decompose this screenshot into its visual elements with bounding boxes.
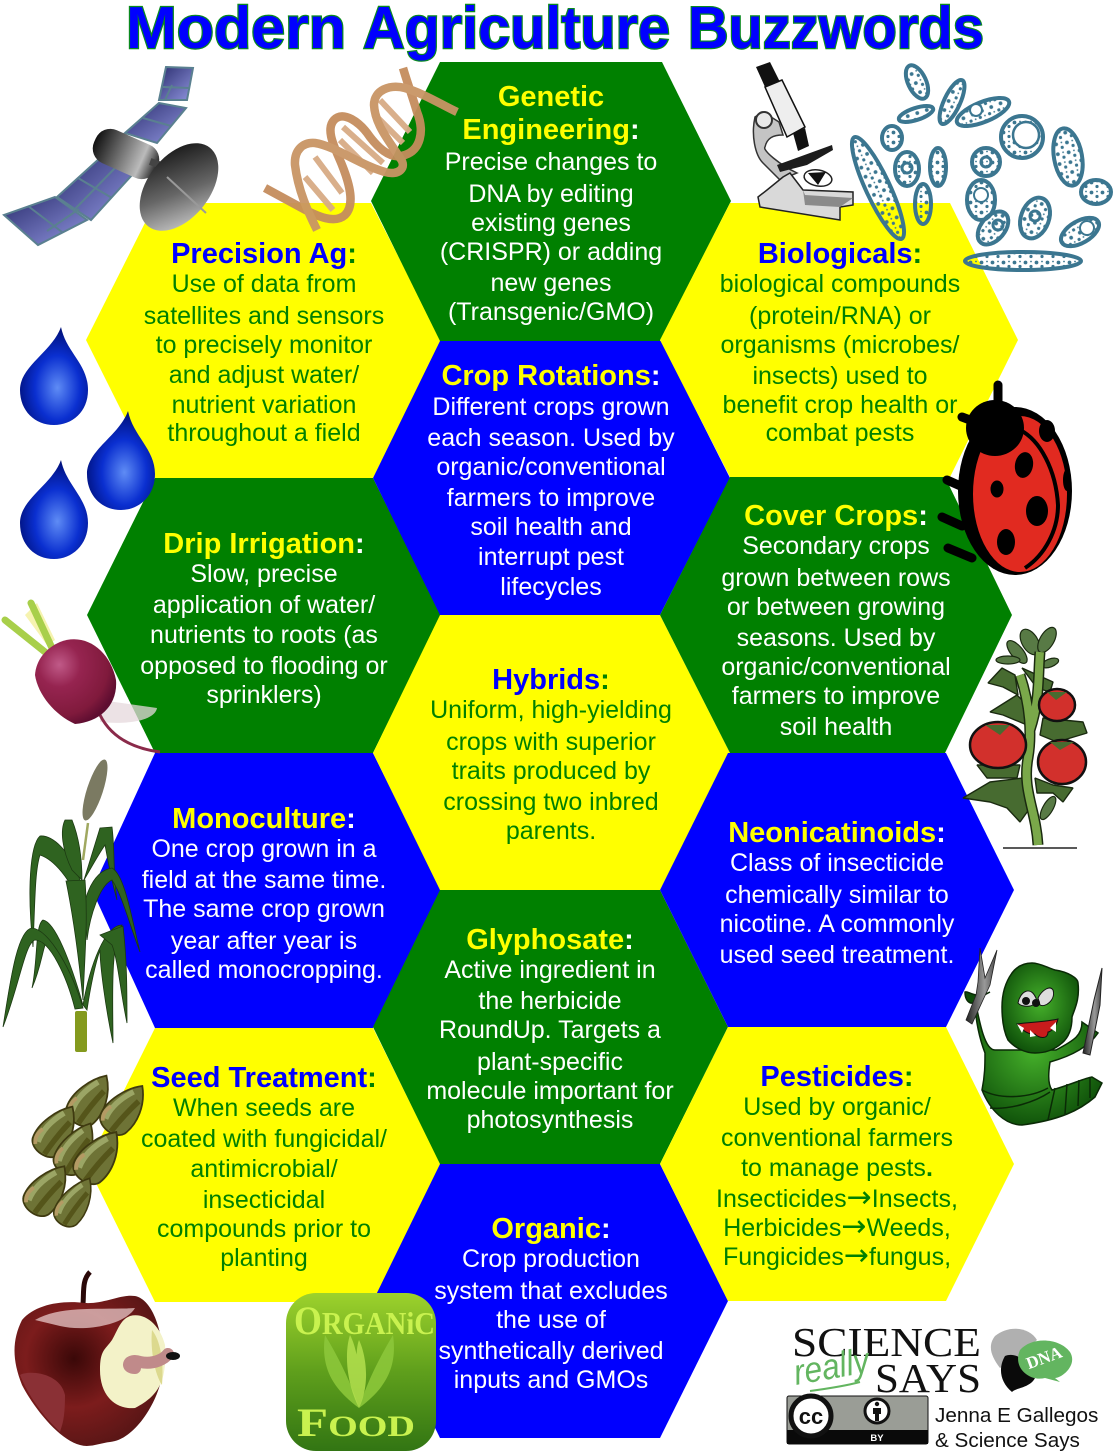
logo: science really says xyxy=(790,1319,1072,1401)
body text: (protein/RNA) or xyxy=(749,302,931,330)
hexagon xyxy=(86,203,441,478)
body text: sprinklers) xyxy=(206,681,322,709)
hexagon xyxy=(92,753,441,1028)
body text: lifecycles xyxy=(500,573,602,601)
body text: Crop production xyxy=(462,1245,640,1273)
badge: creative commons xyxy=(787,1396,928,1444)
heading: Drip Irrigation: xyxy=(163,528,365,560)
hexagon xyxy=(660,753,1014,1027)
body text: conventional farmers xyxy=(721,1124,953,1152)
heading: Precision Ag: xyxy=(171,238,357,270)
icon: satellite xyxy=(4,67,234,245)
panel: cover crops xyxy=(660,477,1012,753)
heading: Biologicals: xyxy=(758,238,922,270)
panel: monoculture xyxy=(92,753,441,1028)
body text: satellites and sensors xyxy=(144,302,384,330)
icon: DNA helix xyxy=(265,68,457,230)
icon: hungry caterpillar xyxy=(965,948,1102,1125)
body text: Use of data from xyxy=(172,270,356,298)
body text: used seed treatment. xyxy=(720,941,954,969)
body text: farmers to improve xyxy=(447,484,655,512)
panel: hybrids xyxy=(373,615,730,890)
hexagon xyxy=(660,1027,1014,1301)
body text: Active ingredient in xyxy=(444,956,656,984)
body text: compounds prior to xyxy=(157,1215,371,1243)
body text: seasons. Used by xyxy=(737,624,936,652)
heading: Genetic xyxy=(498,81,604,113)
heading: Seed Treatment: xyxy=(151,1062,377,1094)
body text: When seeds are xyxy=(173,1094,355,1122)
hexagon xyxy=(373,890,728,1164)
body text: crops with superior xyxy=(446,728,656,756)
body text: nutrient variation xyxy=(172,391,356,419)
icon: ladybug xyxy=(942,385,1072,575)
credit text: Jenna E Gallegos xyxy=(935,1404,1098,1427)
body text: called monocropping. xyxy=(145,956,383,984)
body text: nicotine. A commonly xyxy=(720,910,955,938)
body text: The same crop grown xyxy=(143,895,385,923)
icon: microscope xyxy=(753,62,853,220)
body text: One crop grown in a xyxy=(151,835,377,863)
panel: pesticides xyxy=(660,1027,1014,1301)
heading: Cover Crops: xyxy=(744,500,928,532)
icon: tomato plant xyxy=(963,624,1087,848)
heading: Engineering: xyxy=(462,114,640,146)
body text: biological compounds xyxy=(720,270,960,298)
icon: water drop right xyxy=(87,411,155,510)
body text: Herbicides→Weeds, xyxy=(723,1209,951,1244)
hexagon xyxy=(660,203,1018,477)
hexagon xyxy=(371,62,731,341)
body text: Fungicides→fungus, xyxy=(723,1238,951,1273)
body text: (Transgenic/GMO) xyxy=(448,298,654,326)
body text: year after year is xyxy=(171,927,357,955)
body text: photosynthesis xyxy=(467,1106,633,1134)
icon: beet xyxy=(5,603,160,752)
body text: organic/conventional xyxy=(721,653,951,681)
panel: biologicals xyxy=(660,203,1018,477)
icon: bacteria xyxy=(843,62,1111,270)
body text: coated with fungicidal/ xyxy=(141,1125,387,1153)
body text: and adjust water/ xyxy=(169,361,359,389)
icon: organic food badge xyxy=(286,1293,436,1451)
body text: inputs and GMOs xyxy=(454,1366,648,1394)
panel: organic xyxy=(373,1164,728,1438)
body text: traits produced by xyxy=(452,757,651,785)
body text: soil health xyxy=(780,713,892,741)
heading: Glyphosate: xyxy=(466,924,634,956)
body text: system that excludes xyxy=(434,1277,668,1305)
credit text: & Science Says xyxy=(935,1429,1080,1452)
logo: science really says: DNA xyxy=(1024,1342,1065,1373)
body text: new genes xyxy=(491,269,611,297)
body text: Different crops grown xyxy=(432,393,670,421)
panel: drip irrigation xyxy=(87,478,441,753)
body text: field at the same time. xyxy=(142,866,386,894)
body text: or between growing xyxy=(727,593,945,621)
logo: science really says: SCIENCE xyxy=(792,1319,981,1365)
icon: organic food badge: ORGANiC xyxy=(294,1298,435,1343)
panel: glyphosate xyxy=(373,890,728,1164)
body text: application of water/ xyxy=(153,591,375,619)
icon: water drop top xyxy=(20,327,88,425)
body text: molecule important for xyxy=(426,1077,674,1105)
title xyxy=(126,0,984,61)
panel: precision ag xyxy=(86,203,441,478)
body text: to precisely monitor xyxy=(156,331,372,359)
heading: Organic: xyxy=(491,1213,611,1245)
body text: existing genes xyxy=(471,209,631,237)
heading: Neonicatinoids: xyxy=(728,817,946,849)
body text: plant-specific xyxy=(477,1048,623,1076)
logo: science really says: really xyxy=(790,1339,874,1393)
body text: Slow, precise xyxy=(190,560,338,588)
body text: Precise changes to xyxy=(445,148,657,176)
body text: organisms (microbes/ xyxy=(721,331,960,359)
panel: neonicatinoids xyxy=(660,753,1014,1027)
body text: Uniform, high-yielding xyxy=(430,696,672,724)
heading: Monoculture: xyxy=(172,803,356,835)
badge: creative commons: BY xyxy=(870,1433,884,1444)
body text: throughout a field xyxy=(167,419,361,447)
heading: Hybrids: xyxy=(492,664,610,696)
panel: crop rotations xyxy=(373,341,730,615)
icon: water drop bottom xyxy=(20,460,88,559)
hexagon xyxy=(87,478,441,753)
icon: apple with worm xyxy=(14,1272,180,1446)
heading: Pesticides: xyxy=(760,1061,914,1093)
body text: insecticidal xyxy=(203,1186,325,1214)
icon: organic food badge: FOOD xyxy=(297,1400,415,1445)
body text: interrupt pest xyxy=(478,543,624,571)
icon: corn plant xyxy=(3,757,140,1052)
body text: the use of xyxy=(496,1306,606,1334)
hexagon xyxy=(660,477,1012,753)
hexagon xyxy=(87,1028,441,1302)
body text: synthetically derived xyxy=(438,1337,664,1365)
body text: Secondary crops xyxy=(742,532,930,560)
body text: each season. Used by xyxy=(427,424,675,452)
panel: seed treatment xyxy=(87,1028,441,1302)
body text: Used by organic/ xyxy=(743,1093,931,1121)
body text: organic/conventional xyxy=(436,453,666,481)
body text: grown between rows xyxy=(721,564,951,592)
body text: DNA by editing xyxy=(468,180,634,208)
hexagon xyxy=(373,1164,728,1438)
body text: to manage pests. xyxy=(741,1154,933,1182)
hexagon xyxy=(373,615,730,890)
body text: RoundUp. Targets a xyxy=(439,1016,661,1044)
body text: Class of insecticide xyxy=(730,849,944,877)
body text: parents. xyxy=(506,817,596,845)
body text: the herbicide xyxy=(478,987,622,1015)
body text: combat pests xyxy=(766,419,914,447)
body text: chemically similar to xyxy=(725,881,949,909)
hexagon xyxy=(373,341,730,615)
body text: opposed to flooding or xyxy=(140,652,388,680)
body text: nutrients to roots (as xyxy=(150,621,378,649)
body text: (CRISPR) or adding xyxy=(440,238,662,266)
logo: science really says: SAYS xyxy=(875,1355,981,1401)
heading: Crop Rotations: xyxy=(441,360,661,392)
body text: benefit crop health or xyxy=(723,391,957,419)
body text: farmers to improve xyxy=(732,682,940,710)
panel: genetic engineering xyxy=(371,62,731,341)
badge: creative commons: cc xyxy=(799,1404,823,1429)
body text: insects) used to xyxy=(752,362,928,390)
body text: soil health and xyxy=(470,513,632,541)
body text: antimicrobial/ xyxy=(190,1155,338,1183)
body text: planting xyxy=(220,1244,308,1272)
icon: seeds xyxy=(18,1066,156,1232)
body text: Insecticides→Insects, xyxy=(716,1180,958,1215)
body text: crossing two inbred xyxy=(443,788,659,816)
